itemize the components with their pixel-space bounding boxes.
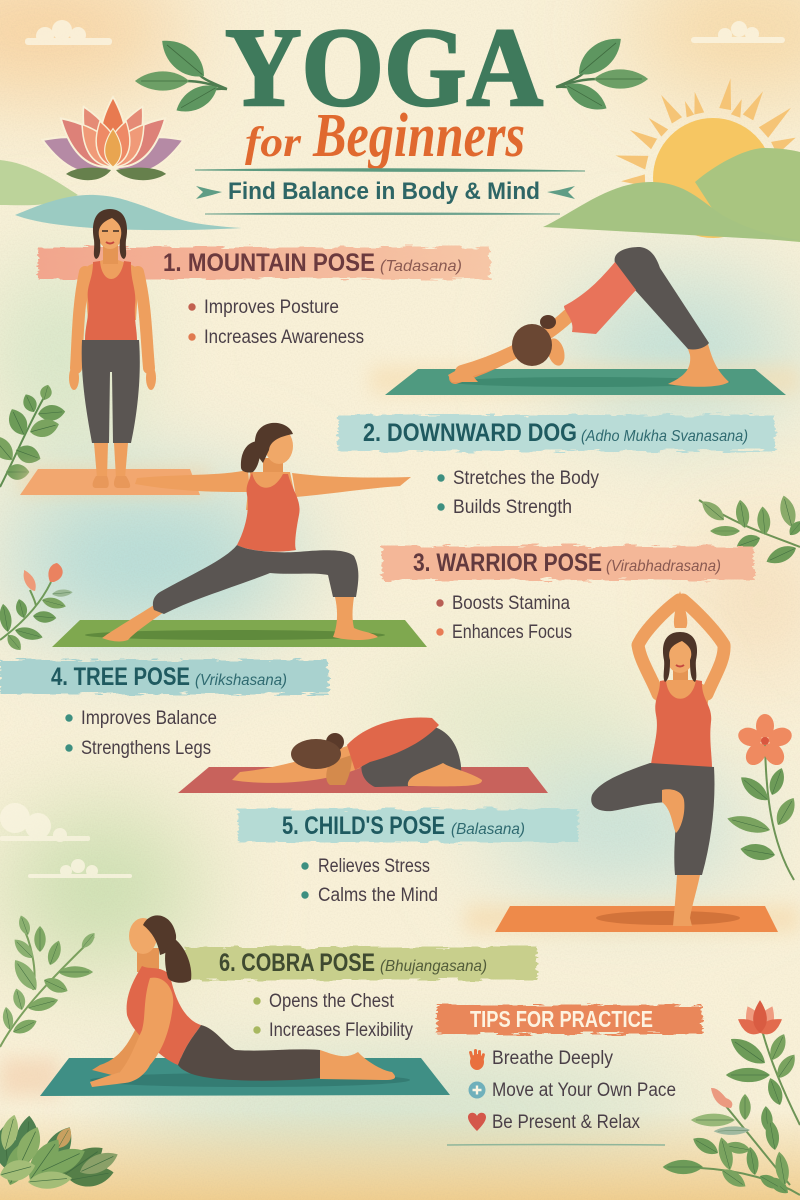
icon: hand bbox=[469, 1049, 485, 1070]
sprig: right middle bbox=[698, 494, 800, 568]
benefits list bbox=[65, 708, 217, 759]
figure: warrior pose bbox=[102, 423, 411, 641]
title: for Beginners: for bbox=[245, 120, 302, 166]
hills: right bbox=[543, 148, 800, 242]
benefits list: Increases Awareness bbox=[204, 327, 364, 348]
flower and sprig: right bbox=[725, 714, 800, 880]
figure: cobra pose bbox=[90, 915, 395, 1087]
benefits list: Stretches the Body bbox=[453, 468, 599, 489]
heading: 2. DOWNWARD DOG bbox=[363, 419, 577, 447]
figure: tree pose bbox=[591, 591, 724, 926]
sanskrit name: (Adho Mukha Svanasana) bbox=[581, 428, 748, 445]
tip: pace: Move at Your Own Pace bbox=[492, 1080, 676, 1101]
benefits list bbox=[253, 991, 413, 1041]
panel: tree pose bbox=[0, 660, 328, 759]
mat: child's pose bbox=[178, 767, 548, 793]
banner bbox=[338, 415, 775, 451]
sanskrit name: (Tadasana) bbox=[380, 258, 462, 275]
benefits list: Enhances Focus bbox=[452, 622, 572, 643]
icon: plus bbox=[468, 1082, 486, 1098]
benefits list: Opens the Chest bbox=[269, 991, 395, 1012]
heading: 1. MOUNTAIN POSE bbox=[163, 249, 375, 277]
heading: 4. TREE POSE bbox=[51, 663, 190, 691]
tip: relax: Be Present & Relax bbox=[492, 1112, 640, 1133]
banner bbox=[437, 1005, 702, 1034]
heading: 6. COBRA POSE bbox=[219, 949, 375, 977]
leaves: title left bbox=[135, 32, 227, 119]
heading: 3. WARRIOR POSE bbox=[413, 549, 602, 577]
figure: downward dog bbox=[448, 247, 729, 387]
sanskrit name: (Vrikshasana) bbox=[195, 672, 287, 689]
cloud: top left bbox=[25, 20, 112, 45]
leaves: title right bbox=[556, 30, 648, 117]
sprig: left flowers bbox=[0, 563, 73, 653]
subtitle: find balance: Find Balance in Body & Mind bbox=[228, 178, 540, 205]
benefits list bbox=[188, 297, 364, 348]
hills: left bbox=[0, 160, 242, 230]
mat: tree pose bbox=[465, 905, 800, 933]
lotus flower bbox=[37, 97, 189, 182]
sun bbox=[614, 77, 799, 238]
title: for Beginners: Beginners bbox=[312, 102, 525, 170]
panel: child's pose bbox=[238, 809, 578, 906]
icon: heart bbox=[468, 1113, 486, 1131]
benefits list: Boosts Stamina bbox=[452, 593, 570, 614]
title: YOGA: YOGA bbox=[225, 6, 543, 130]
sanskrit name: (Virabhadrasana) bbox=[606, 558, 721, 575]
benefits list: Improves Balance bbox=[81, 708, 217, 729]
lotus and foliage: bottom right bbox=[663, 1000, 800, 1197]
banner bbox=[0, 660, 328, 694]
sprig: left lower bbox=[0, 914, 98, 1047]
panel: warrior pose bbox=[382, 546, 754, 643]
panel: mountain pose bbox=[38, 247, 490, 348]
bush: bottom left bbox=[0, 1113, 121, 1191]
benefits list: Calms the Mind bbox=[318, 885, 438, 906]
mat: mountain pose bbox=[20, 468, 210, 495]
mat: downward dog bbox=[370, 366, 800, 395]
panel: tips for practice bbox=[437, 1005, 702, 1133]
heading: 5. CHILD'S POSE bbox=[282, 812, 445, 840]
benefits list: Builds Strength bbox=[453, 497, 572, 518]
banner bbox=[38, 247, 490, 279]
cloud: middle left bbox=[0, 803, 90, 842]
benefits list: Strengthens Legs bbox=[81, 738, 211, 759]
banner bbox=[185, 947, 537, 980]
benefits list: Improves Posture bbox=[204, 297, 339, 318]
sprig: left upper bbox=[0, 383, 66, 487]
cloud: top right bbox=[691, 21, 785, 43]
cloud: lower left bbox=[28, 859, 132, 878]
sanskrit name: (Bhujangasana) bbox=[380, 958, 487, 975]
subtitle: find balance bbox=[195, 169, 585, 214]
banner bbox=[382, 546, 754, 580]
figure: mountain pose bbox=[69, 209, 156, 488]
mat: warrior pose bbox=[52, 620, 427, 647]
benefits list: Relieves Stress bbox=[318, 856, 430, 877]
banner bbox=[238, 809, 578, 842]
benefits list: Increases Flexibility bbox=[269, 1020, 413, 1041]
heading: TIPS FOR PRACTICE bbox=[470, 1006, 653, 1032]
benefits list bbox=[436, 593, 572, 643]
mat: cobra pose bbox=[0, 1058, 450, 1096]
benefits list bbox=[437, 468, 599, 518]
figure: child's pose bbox=[232, 717, 482, 787]
panel: cobra pose bbox=[185, 947, 537, 1041]
title: for Beginners bbox=[245, 102, 525, 170]
tip: breathe: Breathe Deeply bbox=[492, 1048, 613, 1069]
benefits list bbox=[301, 856, 438, 906]
sanskrit name: (Balasana) bbox=[451, 821, 525, 838]
panel: downward dog bbox=[338, 415, 775, 518]
